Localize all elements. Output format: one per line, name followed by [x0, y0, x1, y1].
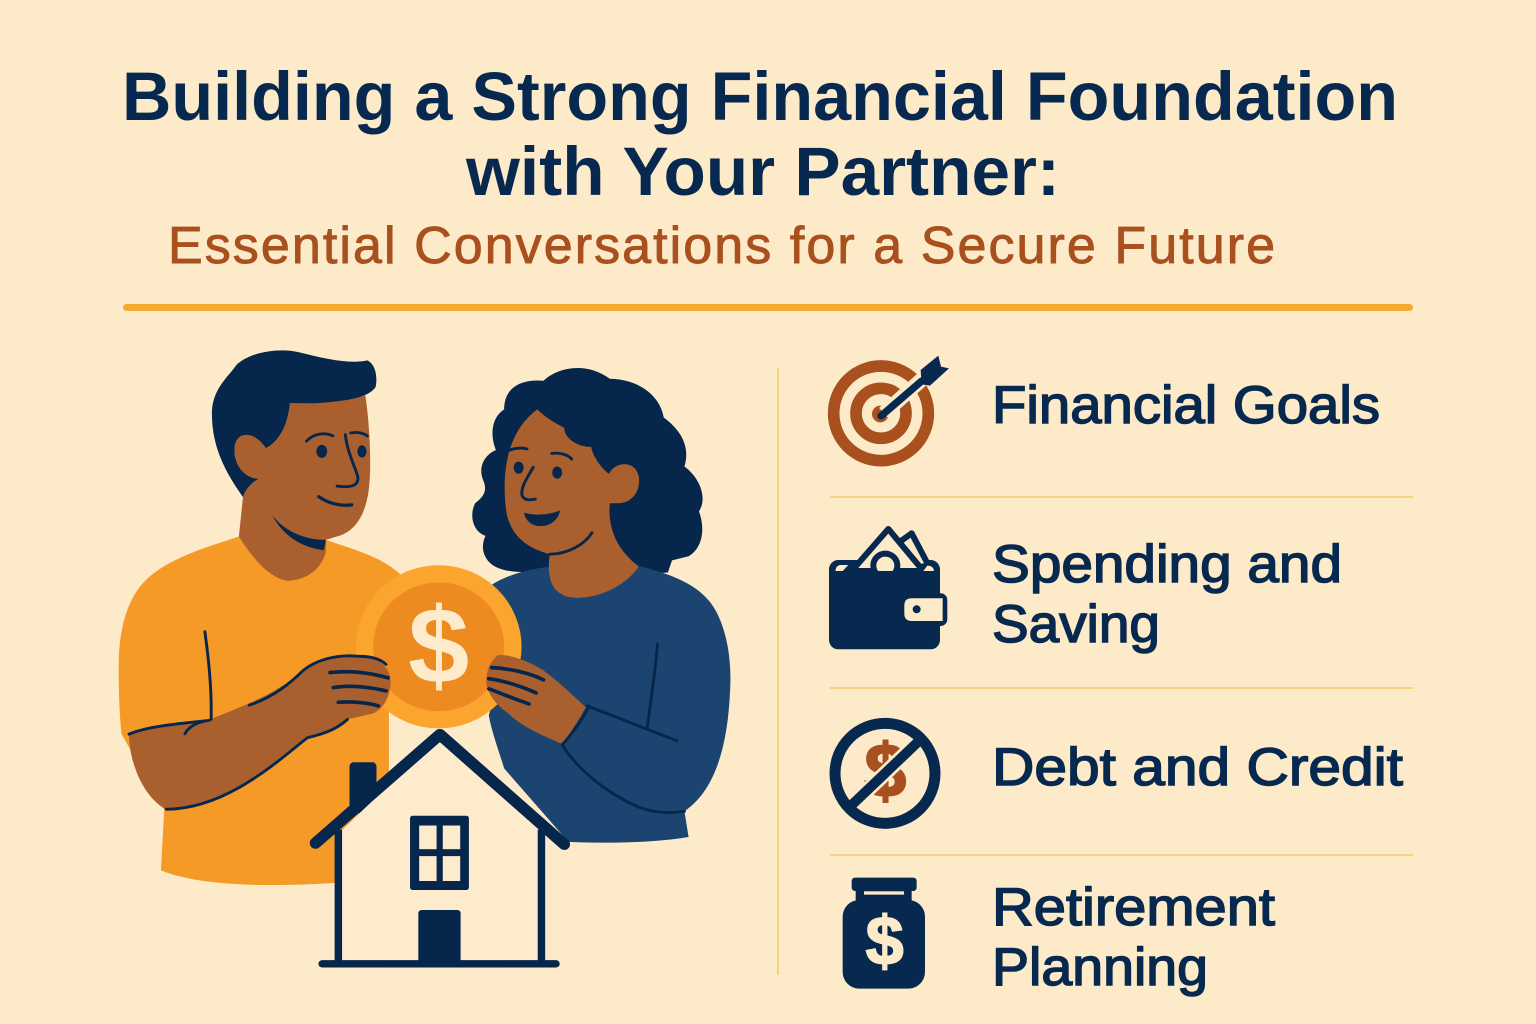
item: retirement planning: Retirement	[992, 878, 1275, 937]
coin	[356, 565, 522, 728]
man's face details	[272, 433, 367, 550]
coin: $	[408, 585, 469, 707]
icon: target with arrow	[834, 356, 949, 461]
woman's head and neck	[505, 409, 639, 598]
man's head and neck	[234, 395, 370, 581]
item: debt and credit	[835, 723, 1403, 823]
icon: crossed-out dollar: $	[864, 729, 906, 813]
title: with Your Partner:	[465, 133, 1060, 210]
house	[316, 735, 564, 965]
item: spending and saving: Spending and	[992, 535, 1342, 594]
icon: wallet with cash	[829, 529, 947, 649]
icon: savings jar	[843, 878, 925, 989]
man's shirt	[119, 537, 401, 885]
man's arm and hand	[129, 632, 391, 811]
title	[122, 58, 1398, 210]
man's hair	[212, 350, 376, 497]
icon: crossed-out dollar	[835, 723, 935, 823]
woman's sweater	[489, 566, 730, 843]
item: retirement planning	[843, 878, 1275, 997]
title: Building a Strong Financial Foundation	[122, 58, 1398, 135]
item: spending and saving: Saving	[992, 595, 1160, 654]
item: debt and credit: Debt and Credit	[992, 738, 1403, 797]
woman's face details	[510, 448, 592, 554]
icon: savings jar: $	[866, 903, 904, 979]
item: financial goals: Financial Goals	[992, 376, 1380, 435]
woman's hair	[472, 368, 703, 577]
item: retirement planning: Planning	[992, 938, 1208, 997]
item: spending and saving	[829, 529, 1342, 654]
illustration: couple holding coin above house	[119, 350, 730, 965]
subtitle: Essential Conversations for a Secure Future	[168, 217, 1275, 275]
woman's arm and hand	[486, 644, 684, 812]
item: financial goals	[834, 356, 1380, 461]
